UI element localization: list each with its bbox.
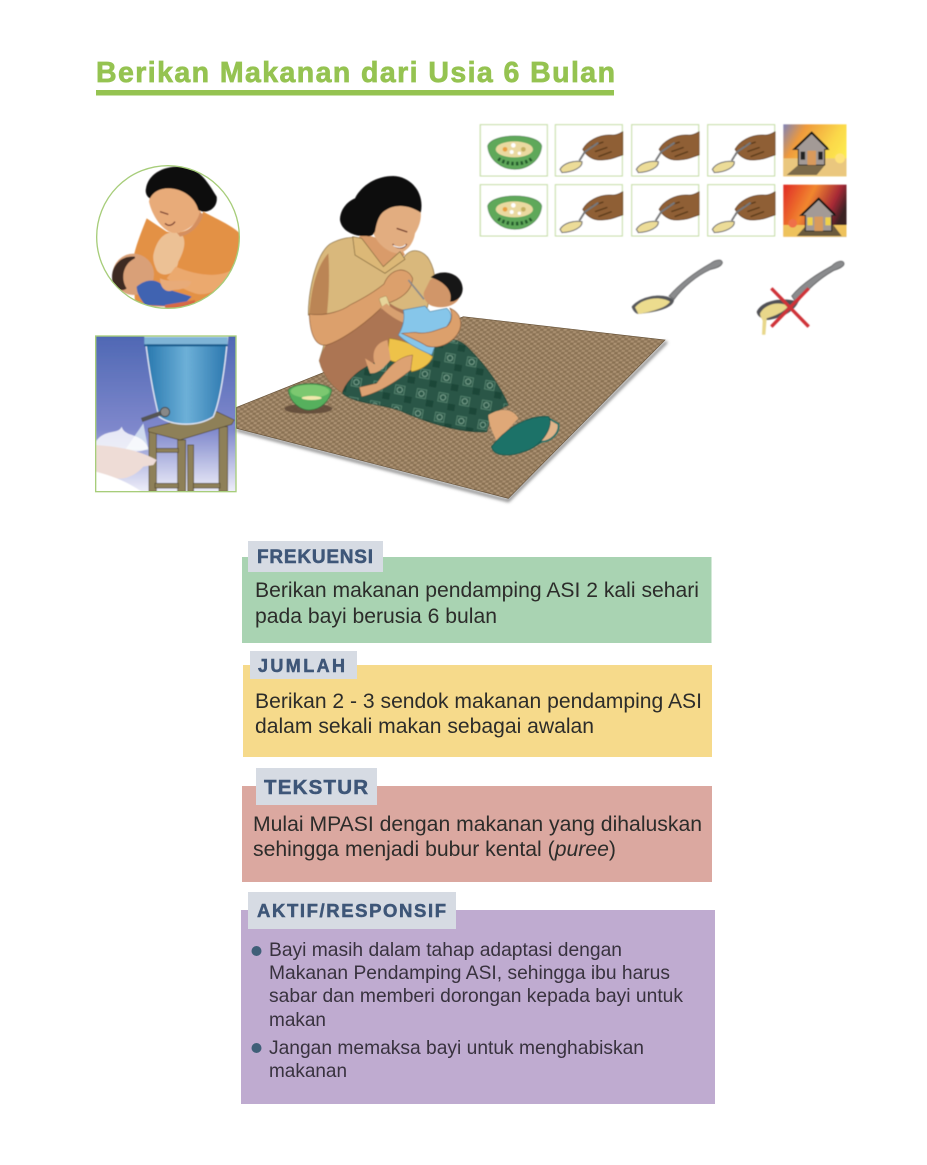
bullet: be patient: Bayi masih dalam tahap adaptasi dengan bbox=[269, 939, 622, 961]
woven mat bbox=[237, 317, 665, 498]
panel: handwashing with water bucket bbox=[96, 336, 236, 492]
bullet: do not force: makanan bbox=[269, 1060, 347, 1082]
text: amount advice: Berikan 2 - 3 sendok makanan pendamping ASI bbox=[255, 689, 702, 713]
icon: spoon 3, morning row bbox=[708, 125, 775, 176]
green bowl bbox=[284, 384, 332, 414]
hair and bun bbox=[340, 176, 421, 236]
label: TEKSTUR: TEKSTUR bbox=[264, 776, 368, 799]
label: JUMLAH bbox=[250, 651, 357, 679]
icon: spoon 1, evening row bbox=[555, 185, 623, 236]
icon: spoon with thick puree bbox=[632, 260, 722, 314]
mother's collar bbox=[353, 237, 405, 273]
icon: baby bbox=[112, 254, 195, 308]
icon: bowl, morning row bbox=[480, 125, 547, 176]
text: texture advice bbox=[253, 812, 702, 861]
batik sarong bbox=[343, 340, 508, 432]
bracelet bbox=[379, 296, 390, 310]
text: frequency advice bbox=[255, 578, 699, 628]
icon: tap bbox=[142, 407, 170, 420]
bullet: be patient: sabar dan memberi dorongan kepada bayi untuk bbox=[269, 985, 683, 1007]
bullet: be patient bbox=[252, 939, 683, 1031]
icon: mother's shirt and chest bbox=[133, 212, 242, 307]
panel: FREKUENSI bbox=[242, 541, 712, 643]
icon: hands under running water bbox=[96, 423, 157, 492]
label: TEKSTUR bbox=[256, 768, 377, 805]
title: Berikan Makanan dari Usia 6 Bulan bbox=[96, 57, 615, 89]
bullet: be patient: makan bbox=[269, 1009, 326, 1031]
bullet: do not force bbox=[252, 1037, 644, 1082]
icon: spoon 3, evening row bbox=[708, 185, 775, 236]
label: AKTIF/RESPONSIF bbox=[248, 892, 456, 929]
infographic page bbox=[95, 60, 848, 1104]
text: texture advice: Mulai MPASI dengan makanan yang dihaluskan bbox=[253, 812, 702, 836]
icon: mother's head and hair bbox=[146, 166, 217, 237]
panel: mother breastfeeding bbox=[97, 166, 242, 308]
panel: JUMLAH bbox=[243, 651, 712, 757]
panel: TEKSTUR bbox=[242, 768, 712, 882]
icon: spoon with runny puree crossed out bbox=[757, 261, 844, 335]
icon: wooden stool bbox=[148, 412, 234, 492]
bullet: be patient: Makanan Pendamping ASI, sehingga ibu harus bbox=[269, 962, 670, 984]
panel: meal schedule and spoons bbox=[480, 124, 847, 335]
text: amount advice: dalam sekali makan sebagai awalan bbox=[255, 714, 594, 738]
icon: water bucket bbox=[144, 337, 228, 424]
mother's foot and sandal bbox=[488, 410, 559, 455]
icon: spoon 1, morning row bbox=[555, 125, 623, 176]
bullet: do not force: Jangan memaksa bayi untuk menghabiskan bbox=[269, 1037, 644, 1059]
mother's feeding arm bbox=[309, 270, 413, 345]
text: frequency advice: Berikan makanan pendamping ASI 2 kali sehari bbox=[255, 578, 699, 602]
mother's shirt bbox=[308, 237, 435, 394]
text: amount advice bbox=[255, 689, 702, 738]
icon: house at daytime bbox=[783, 124, 847, 176]
icon: spoon 2, evening row bbox=[632, 185, 699, 236]
icon: house at sunset bbox=[783, 185, 847, 237]
baby bbox=[359, 272, 463, 397]
icon: bowl, evening row bbox=[480, 185, 547, 236]
mat shadow bbox=[237, 342, 667, 501]
spoon to baby's mouth bbox=[408, 280, 424, 299]
label: JUMLAH: JUMLAH bbox=[258, 656, 345, 676]
text: frequency advice: pada bayi berusia 6 bulan bbox=[255, 604, 497, 628]
text: texture advice: sehingga menjadi bubur kental (puree) bbox=[253, 837, 616, 861]
label: FREKUENSI: FREKUENSI bbox=[257, 547, 373, 568]
label: FREKUENSI bbox=[248, 541, 383, 572]
panel: AKTIF/RESPONSIF bbox=[241, 892, 715, 1104]
icon: spoon 2, morning row bbox=[632, 125, 699, 176]
panel: mother feeding baby on a mat bbox=[237, 176, 667, 501]
mother's arm holding baby bbox=[402, 308, 461, 347]
label: AKTIF/RESPONSIF: AKTIF/RESPONSIF bbox=[257, 900, 446, 921]
mother's neck and head bbox=[340, 176, 421, 270]
